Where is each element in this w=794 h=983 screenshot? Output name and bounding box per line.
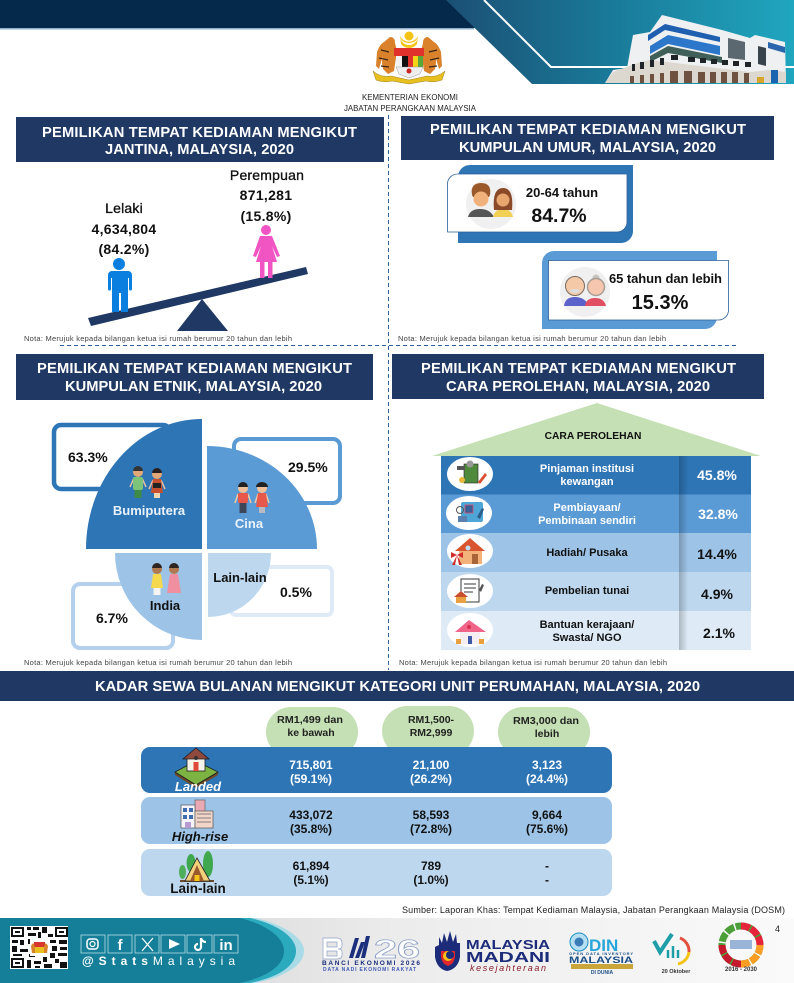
row: Lain-lain: (5.1%) — [293, 873, 329, 887]
row: High-rise: 9,664 — [532, 808, 562, 822]
logo: Malaysia Madani — [435, 931, 551, 973]
heading: ethnic: KUMPULAN ETNIK, MALAYSIA, 2020 — [65, 379, 322, 395]
row: High-rise: (72.8%) — [410, 822, 452, 836]
icon: gift house — [451, 538, 485, 565]
column header: RM1,499 and below — [266, 707, 358, 757]
icon: landed house — [175, 748, 218, 788]
card: 65+: 15.3% — [632, 292, 689, 314]
icon: cabin and trees — [179, 851, 214, 882]
social media icons — [81, 935, 238, 954]
segment: Lain-lain: Lain-lain — [213, 570, 267, 585]
panel: age group — [398, 116, 774, 343]
logo: Malaysia Madani: MALAYSIA — [466, 937, 551, 952]
heading: age — [401, 116, 774, 160]
icon: cash purchase document — [454, 579, 484, 603]
row: Bantuan kerajaan / Swasta / NGO — [441, 611, 751, 650]
icon: seniors — [560, 267, 610, 317]
row: Bantuan kerajaan / Swasta / NGO: Swasta/ NGO — [552, 632, 622, 644]
row: High-rise: 58,593 — [413, 808, 450, 822]
row: Pembiayaan / Pembinaan sendiri — [441, 494, 751, 533]
label: male: Lelaki — [105, 200, 143, 216]
segment: Cina: 29.5% — [288, 459, 328, 475]
column header: RM1,500-RM2,999: RM1,500- — [408, 714, 455, 726]
card: 65+: 65 tahun dan lebih — [609, 271, 722, 286]
column header: RM3,000 and above — [498, 707, 590, 757]
card: 65+ — [542, 251, 728, 329]
row: Pembiayaan / Pembinaan sendiri: 32.8% — [698, 506, 738, 522]
panel: monthly rent — [0, 671, 794, 896]
heading: acquisition: PEMILIKAN TEMPAT KEDIAMAN MENGIKUT — [421, 361, 736, 377]
segment: Cina — [207, 439, 340, 549]
heading: gender — [16, 117, 384, 162]
icon: woman — [253, 225, 280, 278]
heading: acquisition — [392, 354, 764, 399]
row: High-rise: High-rise — [172, 829, 228, 844]
heading: gender: JANTINA, MALAYSIA, 2020 — [105, 142, 294, 158]
column header: RM1,499 and below: RM1,499 dan — [277, 714, 343, 726]
ministry name: KEMENTERIAN EKONOMI — [362, 93, 458, 102]
row: Lain-lain: - — [545, 873, 549, 887]
heading: age: KUMPULAN UMUR, MALAYSIA, 2020 — [459, 140, 716, 156]
image: office building — [605, 15, 786, 83]
row: Hadiah / Pusaka — [441, 533, 751, 572]
row: High-rise: (35.8%) — [290, 822, 332, 836]
segment: Cina: Cina — [235, 516, 264, 531]
column header: RM1,499 and below: ke bawah — [287, 727, 335, 739]
row: Pembiayaan / Pembinaan sendiri: Pembinaan sendiri — [538, 515, 636, 527]
row: High-rise — [141, 797, 612, 844]
column header: RM1,500-RM2,999 — [382, 706, 474, 756]
icon: loan — [457, 460, 487, 484]
logo: ODIN: OPEN DATA INVENTORY — [569, 951, 633, 956]
row: Hadiah / Pusaka: Hadiah/ Pusaka — [546, 547, 629, 559]
row: Landed: 21,100 — [413, 758, 450, 772]
column header: RM3,000 and above: lebih — [535, 728, 559, 740]
logo: Malaysia Madani: kesejahteraan — [470, 963, 546, 973]
icon: aid house — [455, 620, 486, 644]
logo: 20 Oktober — [654, 934, 691, 975]
segment: Bumiputera — [54, 419, 202, 549]
row: Bantuan kerajaan / Swasta / NGO: Bantuan kerajaan/ — [540, 619, 634, 631]
logo: SDG 2016-2030 — [722, 926, 760, 973]
row: Lain-lain: (1.0%) — [413, 873, 449, 887]
row: Pinjaman institusi kewangan: 45.8% — [697, 467, 737, 483]
logo: ODIN — [569, 933, 634, 976]
icon: Cina children — [235, 482, 269, 513]
header banner — [0, 0, 794, 84]
note: Nota: Merujuk kepada bilangan ketua isi rumah berumur 20 tahun dan lebih — [24, 658, 292, 667]
logo: Banci Ekonomi 2026: DATA NADI EKONOMI RAKYAT — [323, 967, 416, 973]
row: Lain-lain — [141, 849, 612, 896]
row: Landed: 715,801 — [289, 758, 333, 772]
icon: Bumiputera children — [130, 466, 165, 498]
icon: man — [108, 258, 132, 312]
social media icons: in — [219, 937, 233, 954]
panel: gender — [16, 117, 384, 343]
row: Pinjaman institusi kewangan — [441, 456, 751, 494]
note: Nota: Merujuk kepada bilangan ketua isi rumah berumur 20 tahun dan lebih — [24, 334, 292, 343]
row: Landed: (59.1%) — [290, 772, 332, 786]
column header: RM1,500-RM2,999: RM2,999 — [410, 727, 452, 739]
logo: ODIN: DI DUNIA — [591, 970, 613, 976]
logo: SDG 2016-2030: 2016 - 2030 — [725, 967, 758, 973]
heading: rent: KADAR SEWA BULANAN MENGIKUT KATEGORI UNIT PERUMAHAN, MALAYSIA, 2020 — [95, 679, 700, 695]
row: Pembelian tunai — [441, 572, 751, 611]
row: Landed: Landed — [175, 779, 222, 794]
segment: India: India — [150, 598, 181, 613]
logo: Banci Ekonomi 2026: 26 — [374, 934, 420, 964]
row: Hadiah / Pusaka: 14.4% — [697, 546, 737, 562]
row: High-rise: (75.6%) — [526, 822, 568, 836]
label: female: (15.8%) — [240, 208, 292, 224]
icon: self-build — [456, 502, 484, 522]
row: Landed: (24.4%) — [526, 772, 568, 786]
label: female: 871,281 — [240, 187, 292, 203]
card: 20-64: 84.7% — [531, 205, 587, 227]
row: Bantuan kerajaan / Swasta / NGO: 2.1% — [703, 625, 736, 641]
row: Pembelian tunai: Pembelian tunai — [545, 585, 629, 597]
ministry name: JABATAN PERANGKAAN MALAYSIA — [344, 104, 477, 113]
label: male — [92, 200, 156, 257]
roof: CARA PEROLEHAN — [545, 431, 641, 442]
row: Landed — [141, 747, 612, 794]
heading: ethnic — [16, 354, 373, 400]
row: Pinjaman institusi kewangan: Pinjaman institusi — [540, 463, 634, 475]
roof — [432, 403, 761, 456]
social media icons: f — [118, 937, 124, 954]
logo: ODIN: MALAYSIA — [569, 955, 634, 965]
icon: QR emblem — [30, 939, 49, 956]
card: 20-64 — [448, 165, 633, 243]
segment: Bumiputera: 63.3% — [68, 449, 108, 465]
page number: 4 — [775, 924, 780, 934]
row: Landed: (26.2%) — [410, 772, 452, 786]
icon: adults — [466, 179, 516, 229]
segment: Bumiputera: Bumiputera — [113, 503, 186, 518]
panel: ethnic group — [16, 354, 373, 667]
icon: national emblem — [373, 32, 445, 84]
heading: ethnic: PEMILIKAN TEMPAT KEDIAMAN MENGIKUT — [37, 361, 352, 377]
logo: Banci Ekonomi 2026: BANCI EKONOMI 2026 — [322, 960, 420, 967]
heading: acquisition: CARA PEROLEHAN, MALAYSIA, 2020 — [446, 379, 710, 395]
card: 20-64: 20-64 tahun — [526, 185, 598, 200]
row: Pembiayaan / Pembinaan sendiri: Pembiayaan/ — [553, 502, 621, 514]
label: female: Perempuan — [230, 167, 304, 183]
row: Landed: 3,123 — [532, 758, 562, 772]
segment: India — [73, 553, 202, 648]
row: Pembelian tunai: 4.9% — [701, 586, 734, 602]
icon: India children — [151, 563, 181, 595]
note: Nota: Merujuk kepada bilangan ketua isi rumah berumur 20 tahun dan lebih — [399, 658, 667, 667]
heading: gender: PEMILIKAN TEMPAT KEDIAMAN MENGIKUT — [42, 125, 357, 141]
row: Pinjaman institusi kewangan: kewangan — [560, 476, 614, 488]
segment: India: 6.7% — [96, 610, 128, 626]
label: male: 4,634,804 — [92, 221, 156, 237]
note: Nota: Merujuk kepada bilangan ketua isi rumah berumur 20 tahun dan lebih — [398, 334, 666, 343]
footer — [0, 918, 794, 983]
seesaw — [88, 267, 308, 331]
label: female — [230, 167, 304, 224]
ministry name — [344, 93, 477, 113]
row: Lain-lain: 61,894 — [293, 859, 330, 873]
segment: Lain-lain: 0.5% — [280, 584, 312, 600]
label: male: (84.2%) — [98, 241, 150, 257]
logo: 20 Oktober: 20 Oktober — [662, 969, 691, 975]
panel: acquisition method — [392, 354, 764, 667]
social handle: @Stats Malaysia — [82, 954, 235, 968]
icon: high-rise — [181, 800, 213, 828]
source note: Sumber: Laporan Khas: Tempat Kediaman Malaysia, Jabatan Perangkaan Malaysia (DOSM) — [402, 905, 785, 915]
QR code — [10, 926, 68, 969]
heading: age: PEMILIKAN TEMPAT KEDIAMAN MENGIKUT — [430, 122, 746, 138]
logo: ODIN: DIN — [589, 936, 618, 955]
segment: Lain-lain — [208, 553, 332, 617]
logo: Malaysia Madani: MADANI — [466, 949, 550, 966]
row: Lain-lain: 789 — [421, 859, 441, 873]
row: High-rise: 433,072 — [289, 808, 333, 822]
row: Lain-lain: - — [545, 859, 549, 873]
logo: Banci Ekonomi 2026 — [322, 934, 420, 973]
heading: rent — [0, 671, 794, 701]
column header: RM3,000 and above: RM3,000 dan — [513, 715, 579, 727]
row: Lain-lain: Lain-lain — [170, 881, 226, 896]
